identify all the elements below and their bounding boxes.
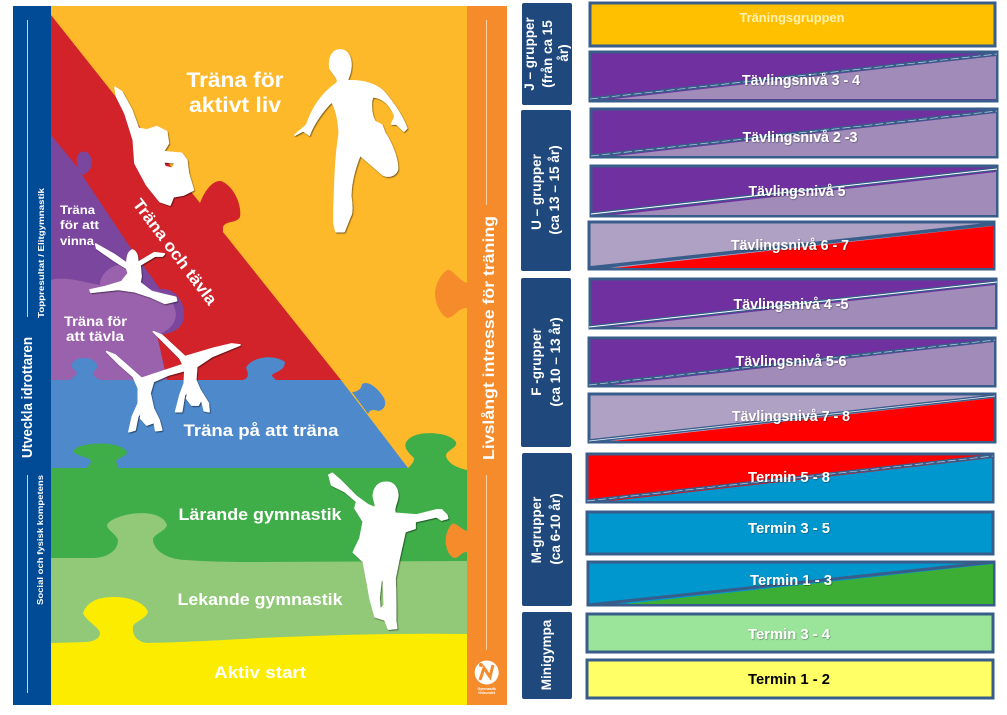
panel: pyramid poster: [13, 6, 507, 705]
group: Minigympa: Minigympa: [539, 619, 554, 690]
heading: train for active life: Träna för: [186, 69, 284, 92]
bar: Termin 1-2: [587, 660, 993, 698]
bar: Tävlingsnivå 4-5: [589, 279, 997, 328]
group: U: U – grupper: [529, 153, 544, 230]
icon: logo: [475, 660, 499, 695]
group: M: M-grupper: [529, 496, 544, 563]
label: lifelong interest: Livslångt intresse för träning: [480, 216, 498, 460]
group: U: (ca 13 – 15 år): [547, 145, 562, 235]
group: J: (från ca 15: [540, 20, 555, 88]
label: learning gymnastics: Lärande gymnastik: [178, 505, 342, 524]
bar: Träningsgruppen: [590, 3, 995, 46]
bar: Tävlingsnivå 6-7: [589, 222, 994, 269]
group: F: (ca 10 – 13 år): [548, 317, 563, 407]
group: M: [522, 453, 572, 606]
group: Minigympa: [522, 612, 572, 699]
label: train and compete: Träna och tävla: [129, 196, 221, 309]
group: F: [521, 278, 571, 447]
layer: playful gymnastics: [51, 513, 467, 655]
label: train to compete: [64, 314, 128, 344]
puzzle tab: orange lower: [446, 524, 467, 558]
layer: train and compete: [51, 15, 341, 380]
figure: runner: [295, 50, 407, 232]
layer: train to train: [51, 357, 408, 468]
bar: Termin 3-5: Termin 3 - 5: [748, 521, 830, 537]
label: train to win: [60, 203, 99, 248]
group: J: år): [556, 44, 571, 62]
layer: learning gymnastics: [51, 433, 467, 565]
label: train to win: Träna: [60, 203, 95, 217]
group: U: [521, 110, 571, 271]
puzzle tab: orange upper: [435, 270, 467, 318]
label: playful gymnastics: Lekande gymnastik: [178, 590, 343, 609]
figure: leaper: [90, 244, 177, 303]
label: active start: Aktiv start: [214, 663, 306, 682]
bar: Tävlingsnivå 4-5: Tävlingsnivå 4 -5: [734, 297, 848, 313]
bar: Tävlingsnivå 5-6: Tävlingsnivå 5-6: [736, 354, 846, 370]
bar: Tävlingsnivå 3-4: [590, 52, 997, 101]
group: F: F -grupper: [529, 328, 544, 396]
bar: Termin 5-8: [587, 454, 993, 502]
bar: Termin 1-3: [588, 562, 994, 605]
label: train to win: för att: [60, 218, 99, 232]
group: M: (ca 6-10 år): [548, 493, 563, 565]
layer: train to win: [51, 135, 184, 380]
side bar: left blue: [13, 6, 51, 705]
bar: Termin 3-4: [587, 614, 993, 652]
puzzle tab: blue: [352, 383, 385, 414]
bar: Tävlingsnivå 5: Tävlingsnivå 5: [748, 184, 846, 200]
figure: cartwheel one: [107, 352, 187, 432]
label: develop the athlete: Utveckla idrottaren: [20, 337, 36, 458]
bar: Tävlingsnivå 5: [591, 166, 997, 216]
layer: train to compete: [51, 264, 176, 380]
bar: Termin 3-4: Termin 3 - 4: [748, 627, 830, 643]
bar: Tävlingsnivå 6-7: Tävlingsnivå 6 - 7: [731, 238, 849, 254]
bar: Termin 3-5: [587, 512, 993, 554]
bar: Tävlingsnivå 7-8: Tävlingsnivå 7 - 8: [732, 409, 850, 425]
figure: slanted gymnast: [115, 87, 193, 205]
panel: group labels: [521, 3, 572, 699]
label: train to compete: att tävla: [66, 329, 125, 344]
bar: Termin 1-2: Termin 1 - 2: [748, 672, 830, 688]
bar: Termin 5-8: Termin 5 - 8: [748, 470, 830, 486]
bar: Tävlingsnivå 7-8: [589, 394, 995, 442]
heading: train for active life: aktivt liv: [189, 94, 281, 117]
label: train to compete: Träna för: [64, 314, 128, 329]
label: top results: Toppresultat / Elitgymnastik: [36, 188, 46, 318]
figure: boy: [329, 473, 448, 629]
icon: logo: Gymnastik: [478, 687, 496, 691]
bar: Tävlingsnivå 2-3: [591, 109, 997, 157]
bar: Tävlingsnivå 5-6: [589, 338, 995, 386]
icon: logo: förbundet: [478, 691, 496, 695]
side bar: right orange: [435, 6, 507, 705]
bar: Tävlingsnivå 2-3: Tävlingsnivå 2 -3: [742, 130, 858, 146]
heading: train for active life: [186, 69, 284, 117]
label: train to win: vinna: [60, 234, 94, 248]
figure: cartwheel two: [153, 332, 240, 412]
group: J: [522, 3, 572, 105]
background: active life: [51, 6, 467, 705]
bar: Termin 1-3: Termin 1 - 3: [750, 573, 832, 589]
layer: active start: [51, 597, 467, 705]
bar: Träningsgruppen: Träningsgruppen: [740, 10, 845, 25]
label: train to train: Träna på att träna: [184, 421, 339, 440]
panel: level bars: [587, 3, 997, 698]
label: social competence: Social och fysisk kompetens: [35, 475, 45, 605]
bar: Tävlingsnivå 3-4: Tävlingsnivå 3 - 4: [742, 73, 860, 89]
group: J: J – grupper: [522, 17, 537, 91]
